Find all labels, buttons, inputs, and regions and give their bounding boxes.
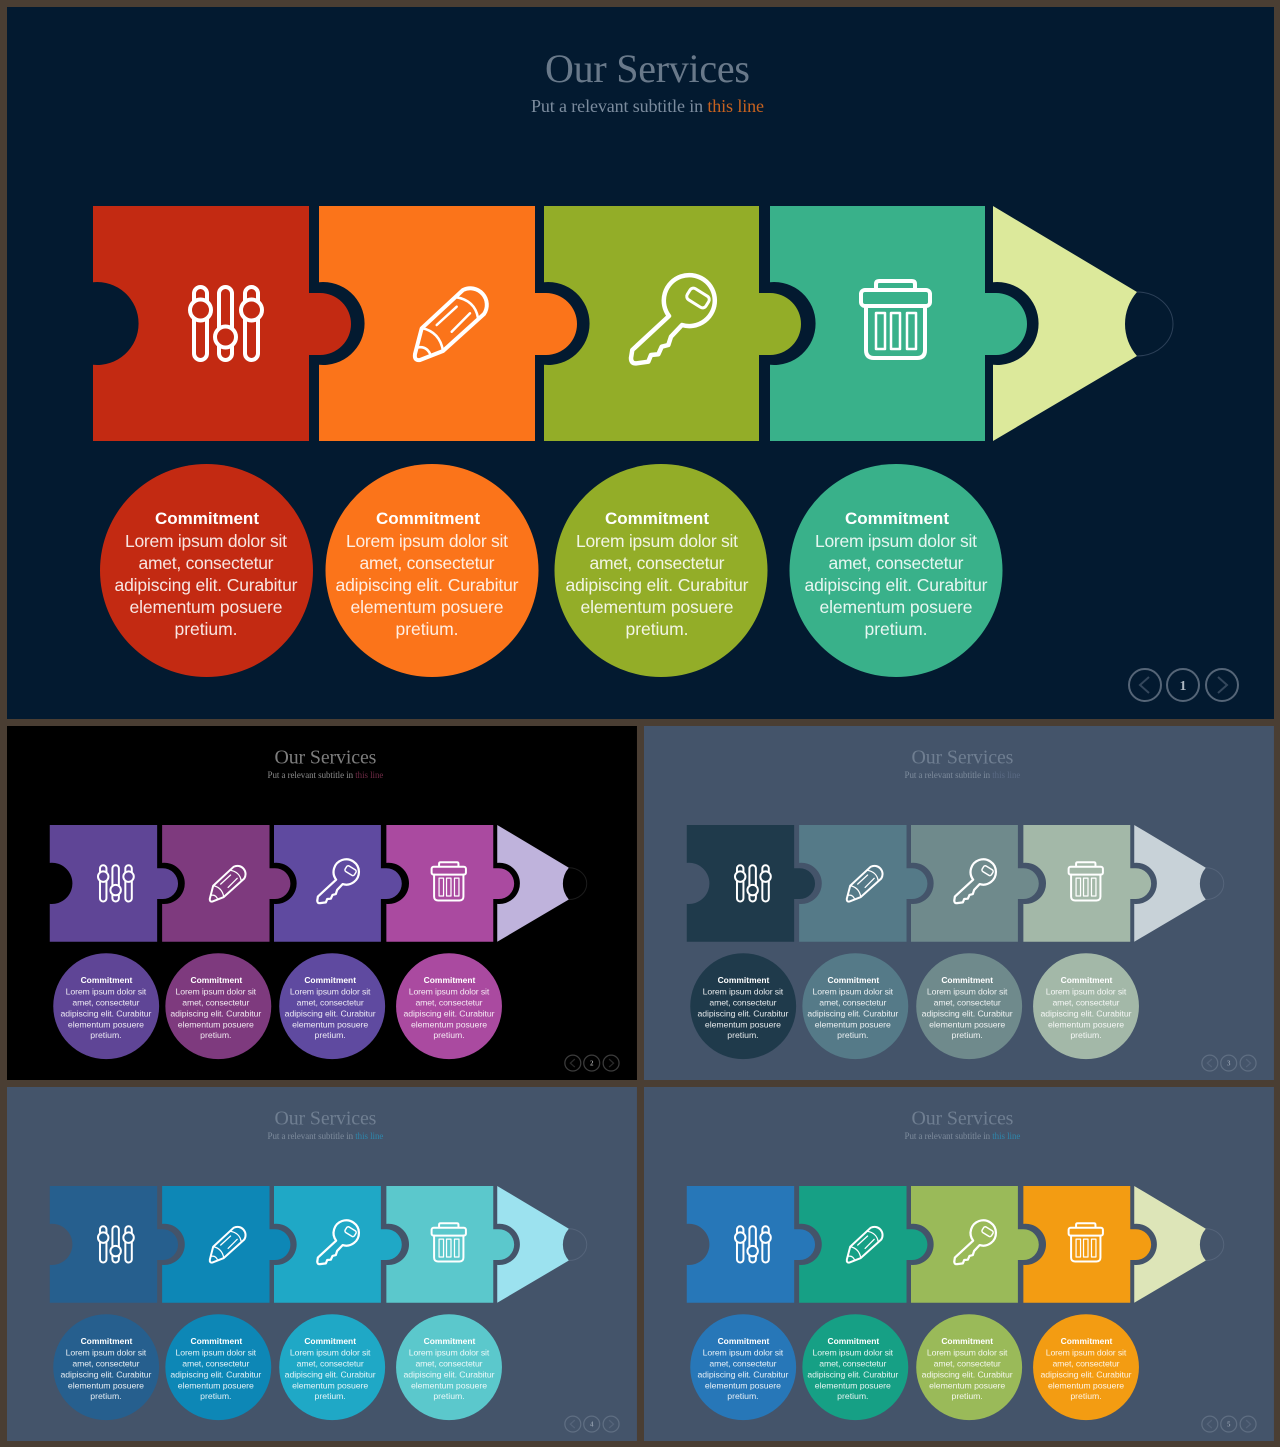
info circle 3: amet, consectetur xyxy=(934,1358,1001,1368)
info circle 2 xyxy=(165,1314,271,1420)
info circle 1 xyxy=(53,953,159,1059)
slide background xyxy=(7,1087,637,1441)
info circle 4: adipiscing elit. Curabitur xyxy=(1041,1369,1132,1379)
info circle 1: pretium. xyxy=(727,1391,759,1401)
icon: key xyxy=(954,859,996,903)
info circle 4: adipiscing elit. Curabitur xyxy=(404,1369,495,1379)
info circle 1: Commitment xyxy=(81,975,132,985)
info circle 3: Lorem ipsum dolor sit xyxy=(576,531,738,551)
info circle 1: Lorem ipsum dolor sit xyxy=(66,1347,147,1357)
info circle 1: Commitment xyxy=(718,1336,769,1346)
info circle 3: elementum posuere xyxy=(292,1019,368,1029)
info circle 3 xyxy=(554,464,768,677)
icon: key xyxy=(631,275,715,363)
arrow tip outline circle xyxy=(1206,1229,1224,1261)
info circle 4: Lorem ipsum dolor sit xyxy=(409,986,490,996)
page navigation: 4 xyxy=(590,1421,594,1429)
info circle 4: Lorem ipsum dolor sit xyxy=(1046,1347,1127,1357)
puzzle piece 1 xyxy=(687,1186,815,1303)
info circle 2: amet, consectetur xyxy=(360,553,495,573)
info circle 3: Commitment xyxy=(605,509,709,528)
info circle 2: adipiscing elit. Curabitur xyxy=(170,1008,261,1018)
info circle 1: adipiscing elit. Curabitur xyxy=(114,575,298,595)
info circle 2: amet, consectetur xyxy=(182,997,249,1007)
info circle 2 xyxy=(802,1314,908,1420)
title: Our Services xyxy=(545,46,750,91)
info circle 3: elementum posuere xyxy=(929,1019,1005,1029)
info circle 1: amet, consectetur xyxy=(709,1358,777,1368)
info circle 1 xyxy=(100,464,313,677)
info circle 1: elementum posuere xyxy=(130,597,282,617)
info circle 3: pretium. xyxy=(626,619,688,639)
title: Our Services xyxy=(911,1107,1014,1129)
slide background xyxy=(644,726,1274,1080)
arrow tip outline circle xyxy=(569,1229,587,1261)
title: Our Services xyxy=(274,1107,377,1129)
info circle 2: Commitment xyxy=(827,975,879,985)
puzzle piece 4 xyxy=(1023,825,1151,942)
info circle 1: elementum posuere xyxy=(68,1380,144,1390)
info circle 2: elementum posuere xyxy=(178,1019,254,1029)
info circle 3: elementum posuere xyxy=(929,1380,1005,1390)
panel: slide 4, blue theme xyxy=(7,1087,637,1441)
puzzle piece 3 xyxy=(274,1186,402,1303)
info circle 4: pretium. xyxy=(433,1030,465,1040)
info circle 2: adipiscing elit. Curabitur xyxy=(170,1369,261,1379)
info circle 4: pretium. xyxy=(864,619,928,639)
info circle 2: adipiscing elit. Curabitur xyxy=(807,1369,898,1379)
puzzle piece 2: orange xyxy=(319,206,577,441)
puzzle piece 2 xyxy=(799,825,927,942)
info circle 4: Commitment xyxy=(845,509,949,528)
info circle 4: adipiscing elit. Curabitur xyxy=(1041,1008,1132,1018)
info circle 1: pretium. xyxy=(174,619,238,639)
info circle 2: pretium. xyxy=(837,1030,868,1040)
info circle 4: amet, consectetur xyxy=(1052,997,1120,1007)
subtitle: Put a relevant subtitle in this line xyxy=(268,1131,383,1141)
icon: pencil xyxy=(210,1227,246,1263)
info circle 1 xyxy=(690,1314,796,1420)
info circle 4: Lorem ipsum dolor sit xyxy=(409,1347,490,1357)
info circle 3: pretium. xyxy=(952,1391,983,1401)
info circle 4: amet, consectetur xyxy=(415,1358,483,1368)
info circle 1: pretium. xyxy=(727,1030,759,1040)
info circle 4: amet, consectetur xyxy=(828,553,964,573)
info circle 1: Lorem ipsum dolor sit xyxy=(703,986,784,996)
page navigation xyxy=(565,1416,619,1432)
icon: trash can xyxy=(861,281,930,358)
info circle 4: adipiscing elit. Curabitur xyxy=(404,1008,495,1018)
info circle 2: pretium. xyxy=(200,1391,231,1401)
info circle 1: Lorem ipsum dolor sit xyxy=(125,531,287,551)
info circle 2: Commitment xyxy=(376,509,480,528)
info circle 3: amet, consectetur xyxy=(590,553,725,573)
info circle 3 xyxy=(279,1314,385,1420)
puzzle piece 3 xyxy=(911,825,1039,942)
icon: trash can xyxy=(1069,862,1103,901)
info circle 3: adipiscing elit. Curabitur xyxy=(285,1369,376,1379)
puzzle piece 2 xyxy=(162,1186,290,1303)
slide background xyxy=(7,7,1274,719)
info circle 4: elementum posuere xyxy=(411,1380,487,1390)
arrow tip xyxy=(993,206,1137,441)
arrow tip xyxy=(497,825,569,942)
info circle 2: elementum posuere xyxy=(350,597,504,617)
page navigation xyxy=(1129,669,1238,701)
info circle 1: elementum posuere xyxy=(68,1019,144,1029)
info circle 1 xyxy=(690,953,796,1059)
info circle 1: elementum posuere xyxy=(705,1380,781,1390)
info circle 3: Lorem ipsum dolor sit xyxy=(927,986,1008,996)
info circle 1: pretium. xyxy=(90,1391,122,1401)
arrow tip outline circle xyxy=(1137,292,1173,356)
info circle 3: Commitment xyxy=(941,975,993,985)
info circle 2 xyxy=(802,953,908,1059)
icon: trash can xyxy=(1069,1223,1103,1262)
info circle 2: adipiscing elit. Curabitur xyxy=(336,575,519,595)
info circle 1: adipiscing elit. Curabitur xyxy=(60,1008,152,1018)
icon: sliders xyxy=(190,287,262,360)
info circle 3: amet, consectetur xyxy=(297,1358,364,1368)
info circle 4: amet, consectetur xyxy=(415,997,483,1007)
title: Our Services xyxy=(274,746,377,768)
info circle 1: adipiscing elit. Curabitur xyxy=(60,1369,152,1379)
info circle 3: Lorem ipsum dolor sit xyxy=(290,1347,371,1357)
arrow tip xyxy=(1134,825,1206,942)
info circle 4: elementum posuere xyxy=(1048,1019,1124,1029)
info circle 4: amet, consectetur xyxy=(1052,1358,1120,1368)
icon: sliders xyxy=(98,865,134,902)
info circle 2: pretium. xyxy=(837,1391,868,1401)
puzzle piece 4 xyxy=(386,825,514,942)
info circle 2: Commitment xyxy=(190,1336,242,1346)
info circle 1: Commitment xyxy=(718,975,769,985)
icon: pencil xyxy=(210,866,246,902)
page navigation xyxy=(565,1055,619,1071)
info circle 1 xyxy=(53,1314,159,1420)
puzzle piece 1: red xyxy=(93,206,351,441)
info circle 3: amet, consectetur xyxy=(934,997,1001,1007)
puzzle piece 2 xyxy=(799,1186,927,1303)
info circle 2: amet, consectetur xyxy=(819,997,886,1007)
puzzle piece 1 xyxy=(50,825,178,942)
puzzle piece 1 xyxy=(50,1186,178,1303)
info circle 2 xyxy=(165,953,271,1059)
info circle 2: amet, consectetur xyxy=(182,1358,249,1368)
arrow tip xyxy=(497,1186,569,1303)
info circle 4 xyxy=(790,464,1002,677)
arrow tip outline circle xyxy=(1206,868,1224,900)
puzzle piece 3: green xyxy=(544,206,801,441)
info circle 4: Lorem ipsum dolor sit xyxy=(815,531,977,551)
slide background xyxy=(644,1087,1274,1441)
info circle 3: adipiscing elit. Curabitur xyxy=(922,1008,1013,1018)
info circle 4: Lorem ipsum dolor sit xyxy=(1046,986,1127,996)
info circle 3: pretium. xyxy=(952,1030,983,1040)
puzzle piece 4: teal xyxy=(770,206,1027,441)
arrow tip outline circle xyxy=(569,868,587,900)
info circle 2: Commitment xyxy=(190,975,242,985)
info circle 4: pretium. xyxy=(433,1391,465,1401)
info circle 2: Lorem ipsum dolor sit xyxy=(813,986,894,996)
page navigation: 1 xyxy=(1180,679,1186,694)
info circle 2: pretium. xyxy=(396,619,458,639)
panel: slide 2, purple on black theme xyxy=(7,726,637,1080)
info circle 4: pretium. xyxy=(1070,1030,1102,1040)
info circle 1: Lorem ipsum dolor sit xyxy=(66,986,147,996)
info circle 2: elementum posuere xyxy=(178,1380,254,1390)
icon: sliders xyxy=(98,1226,134,1263)
icon: trash can xyxy=(432,1223,466,1262)
info circle 2: Lorem ipsum dolor sit xyxy=(176,986,257,996)
info circle 4 xyxy=(1033,953,1139,1059)
info circle 2 xyxy=(326,464,538,677)
info circle 4: adipiscing elit. Curabitur xyxy=(804,575,988,595)
info circle 3: Commitment xyxy=(304,1336,356,1346)
info circle 3: Lorem ipsum dolor sit xyxy=(927,1347,1008,1357)
icon: key xyxy=(954,1220,996,1264)
info circle 1: amet, consectetur xyxy=(709,997,777,1007)
info circle 1: Lorem ipsum dolor sit xyxy=(703,1347,784,1357)
slide background xyxy=(7,726,637,1080)
info circle 1: amet, consectetur xyxy=(72,997,140,1007)
info circle 3 xyxy=(279,953,385,1059)
puzzle piece 2 xyxy=(162,825,290,942)
info circle 3: Commitment xyxy=(304,975,356,985)
icon: sliders xyxy=(735,865,771,902)
info circle 3: pretium. xyxy=(315,1030,346,1040)
info circle 4: Commitment xyxy=(1061,975,1113,985)
info circle 1: adipiscing elit. Curabitur xyxy=(697,1008,789,1018)
title: Our Services xyxy=(911,746,1014,768)
info circle 2: Commitment xyxy=(827,1336,879,1346)
info circle 3: elementum posuere xyxy=(292,1380,368,1390)
info circle 2: adipiscing elit. Curabitur xyxy=(807,1008,898,1018)
info circle 1: amet, consectetur xyxy=(72,1358,140,1368)
page navigation xyxy=(1202,1055,1256,1071)
info circle 4 xyxy=(396,1314,502,1420)
info circle 4: Commitment xyxy=(424,975,476,985)
info circle 4: elementum posuere xyxy=(1048,1380,1124,1390)
panel: slide 3, muted slate theme xyxy=(644,726,1274,1080)
icon: key xyxy=(317,1220,359,1264)
info circle 1: elementum posuere xyxy=(705,1019,781,1029)
info circle 3: elementum posuere xyxy=(580,597,734,617)
info circle 3: adipiscing elit. Curabitur xyxy=(566,575,749,595)
puzzle piece 4 xyxy=(1023,1186,1151,1303)
info circle 1: pretium. xyxy=(90,1030,122,1040)
subtitle: Put a relevant subtitle in this line xyxy=(905,1131,1020,1141)
subtitle: Put a relevant subtitle in this line xyxy=(905,770,1020,780)
info circle 4 xyxy=(1033,1314,1139,1420)
puzzle piece 4 xyxy=(386,1186,514,1303)
icon: pencil xyxy=(847,1227,883,1263)
info circle 1: adipiscing elit. Curabitur xyxy=(697,1369,789,1379)
info circle 2: Lorem ipsum dolor sit xyxy=(813,1347,894,1357)
info circle 1: Commitment xyxy=(81,1336,132,1346)
icon: key xyxy=(317,859,359,903)
icon: pencil xyxy=(847,866,883,902)
info circle 1: amet, consectetur xyxy=(138,553,274,573)
arrow tip xyxy=(1134,1186,1206,1303)
page navigation: 5 xyxy=(1227,1421,1231,1429)
puzzle piece 3 xyxy=(911,1186,1039,1303)
info circle 2: amet, consectetur xyxy=(819,1358,886,1368)
info circle 2: elementum posuere xyxy=(815,1380,891,1390)
icon: pencil xyxy=(415,288,487,360)
info circle 2: Lorem ipsum dolor sit xyxy=(176,1347,257,1357)
info circle 3: Commitment xyxy=(941,1336,993,1346)
info circle 4: Commitment xyxy=(1061,1336,1113,1346)
info circle 3: amet, consectetur xyxy=(297,997,364,1007)
icon: trash can xyxy=(432,862,466,901)
info circle 3 xyxy=(916,1314,1022,1420)
panel: slide 5, multicolour theme xyxy=(644,1087,1274,1441)
info circle 4: pretium. xyxy=(1070,1391,1102,1401)
subtitle: Put a relevant subtitle in this line xyxy=(268,770,383,780)
info circle 1: Commitment xyxy=(155,509,259,528)
panel: main slide, navy theme xyxy=(7,7,1274,719)
page navigation: 2 xyxy=(590,1060,594,1068)
info circle 3: adipiscing elit. Curabitur xyxy=(922,1369,1013,1379)
puzzle piece 3 xyxy=(274,825,402,942)
page navigation xyxy=(1202,1416,1256,1432)
info circle 4: elementum posuere xyxy=(820,597,972,617)
info circle 3: pretium. xyxy=(315,1391,346,1401)
icon: sliders xyxy=(735,1226,771,1263)
info circle 4 xyxy=(396,953,502,1059)
info circle 4: Commitment xyxy=(424,1336,476,1346)
info circle 3 xyxy=(916,953,1022,1059)
info circle 2: Lorem ipsum dolor sit xyxy=(346,531,508,551)
info circle 4: elementum posuere xyxy=(411,1019,487,1029)
subtitle: Put a relevant subtitle in this line xyxy=(531,96,764,116)
info circle 3: Lorem ipsum dolor sit xyxy=(290,986,371,996)
info circle 2: pretium. xyxy=(200,1030,231,1040)
page navigation: 3 xyxy=(1227,1060,1231,1068)
info circle 2: elementum posuere xyxy=(815,1019,891,1029)
puzzle piece 1 xyxy=(687,825,815,942)
info circle 3: adipiscing elit. Curabitur xyxy=(285,1008,376,1018)
